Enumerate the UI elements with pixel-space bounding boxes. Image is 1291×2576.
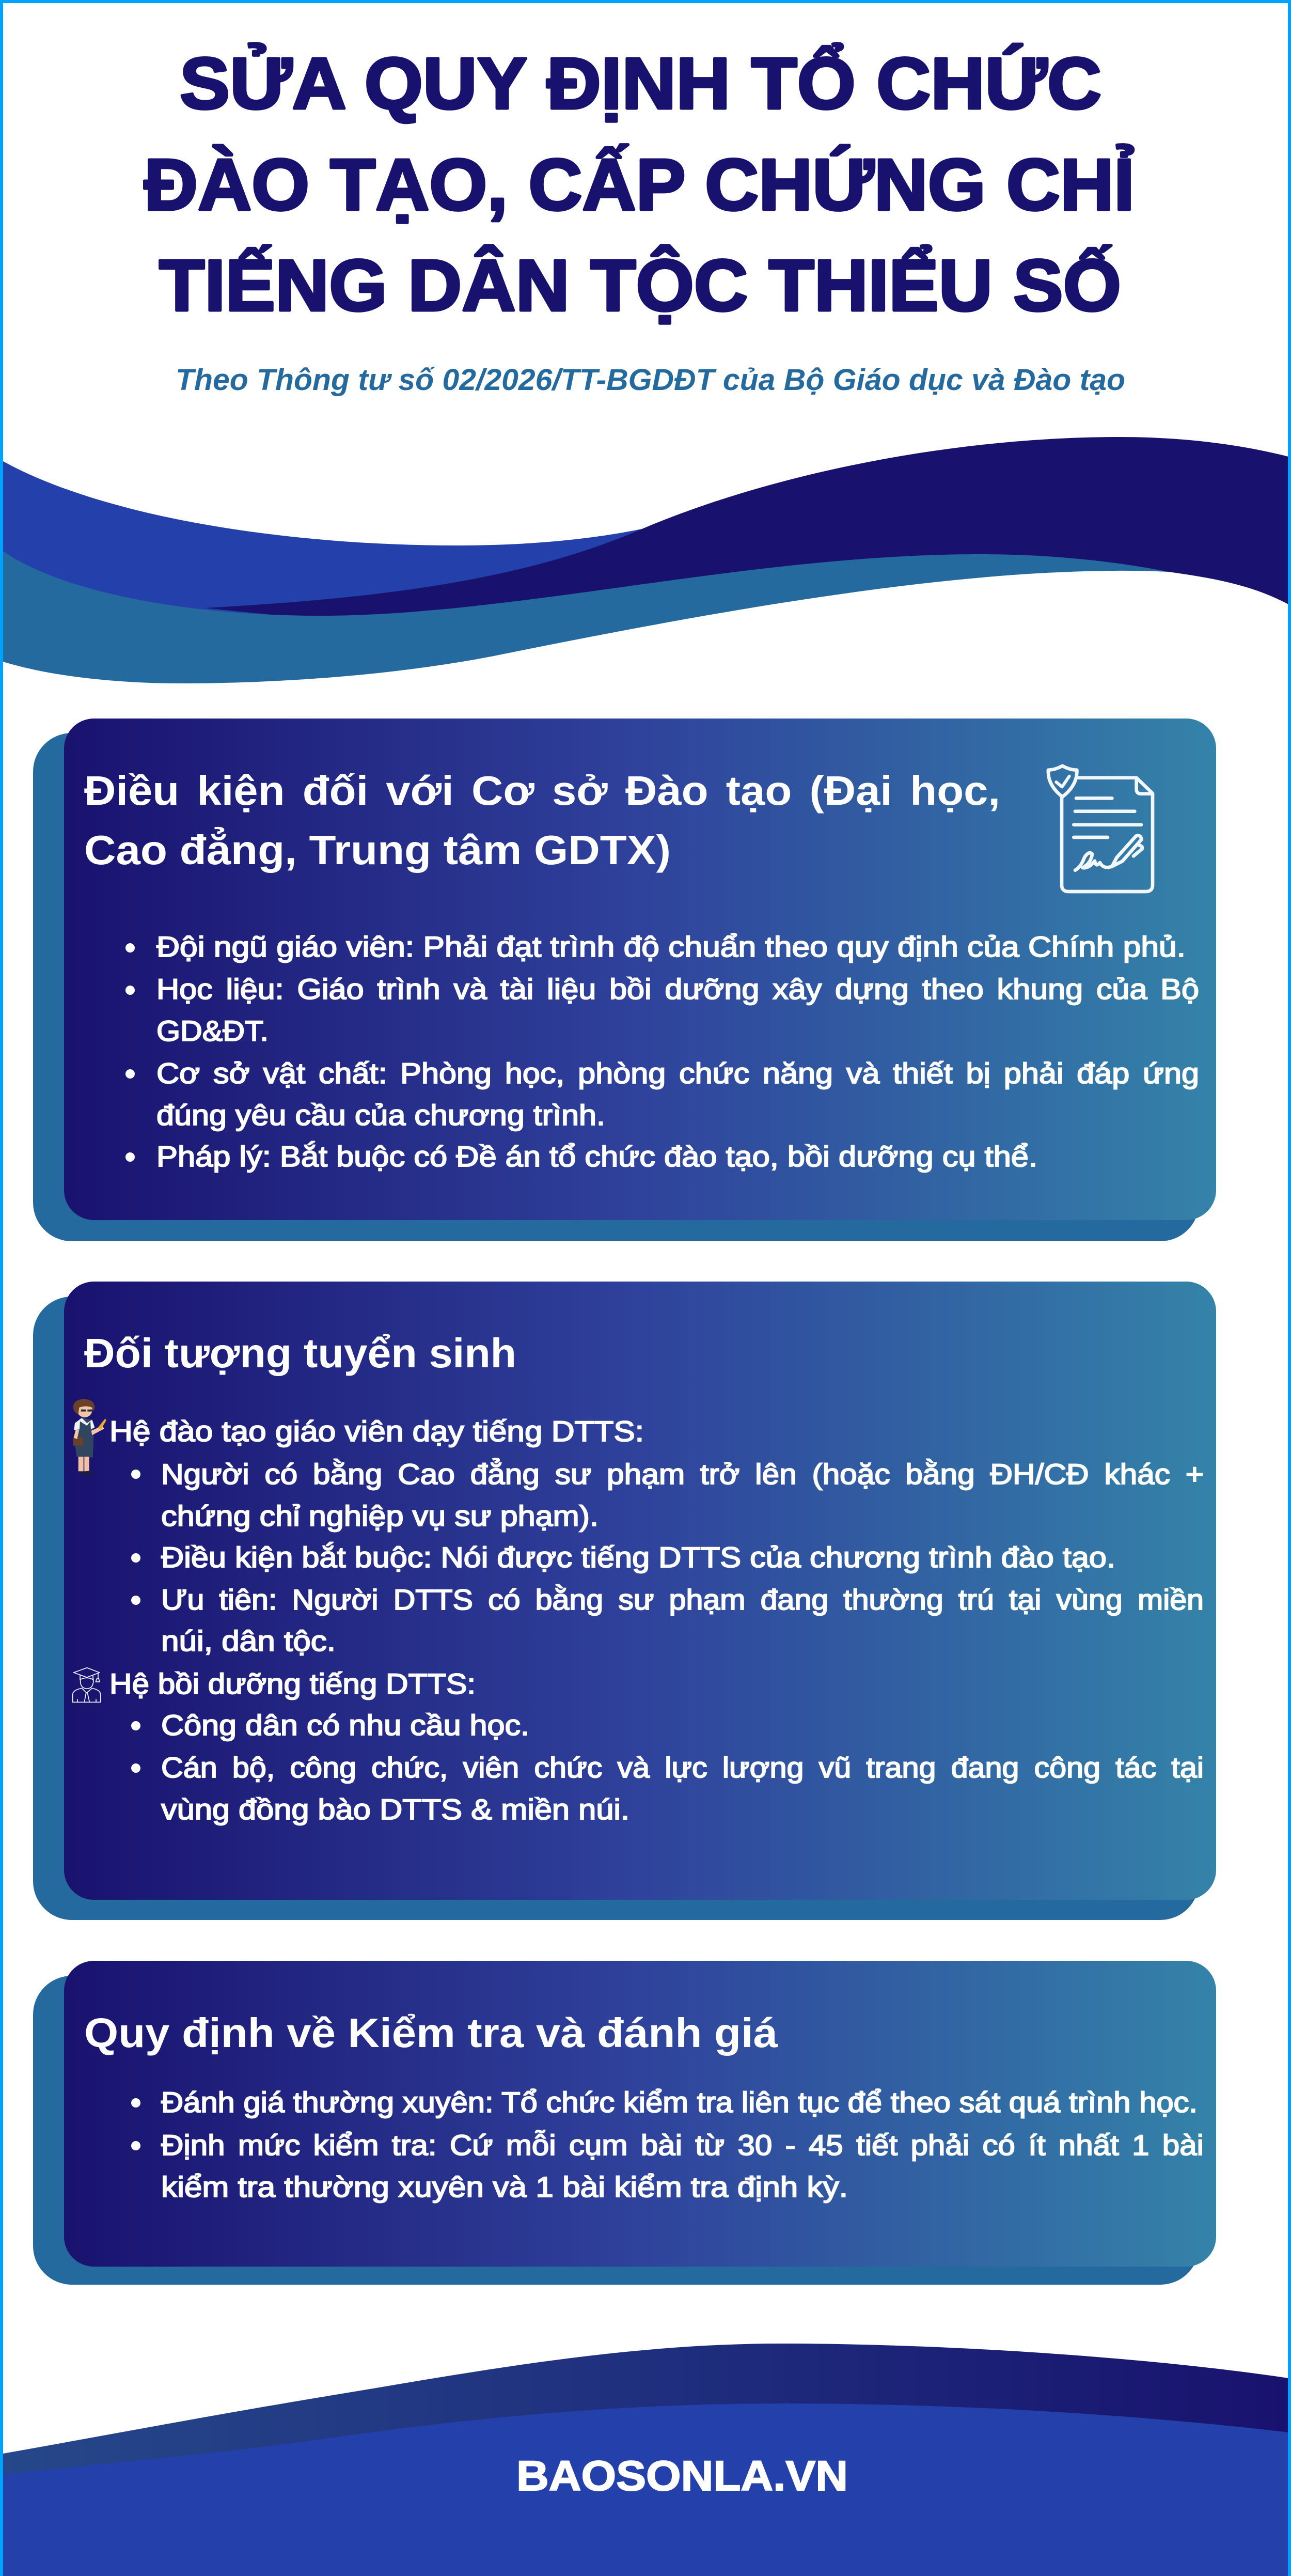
card face	[64, 719, 1216, 1220]
panel: enrolment targets	[33, 1282, 1216, 1920]
bullet list: kiểm tra thường xuyên và 1 bài kiểm tra định kỳ.	[161, 2171, 848, 2203]
card backing	[33, 1297, 1199, 1920]
header wave	[3, 437, 1288, 683]
bullet list: teacher training: Ưu tiên: Người DTTS có bằng sư phạm đang thường trú tại vùng miền	[161, 1583, 1204, 1616]
bullet list: Đánh giá thường xuyên: Tổ chức kiểm tra liên tục để theo sát quá trình học.	[161, 2086, 1198, 2118]
panel: training institution conditions	[33, 719, 1216, 1241]
card face	[64, 1961, 1216, 2267]
bullet list: Định mức kiểm tra: Cứ mỗi cụm bài từ 30 - 45 tiết phải có ít nhất 1 bài	[161, 2129, 1204, 2161]
icon: signed document with shield	[1048, 766, 1153, 892]
bullet list: teacher training: Điều kiện bắt buộc: Nói được tiếng DTTS của chương trình đào tạo.	[161, 1541, 1115, 1573]
bullet list: teacher training: Người có bằng Cao đẳng sư phạm trở lên (hoặc bằng ĐH/CĐ khác +	[161, 1458, 1204, 1490]
card backing	[33, 1976, 1199, 2285]
title: SỬA QUY ĐỊNH TỔ CHỨC	[180, 42, 1101, 124]
subheading: teacher training: Hệ đào tạo giáo viên dạy tiếng DTTS:	[109, 1415, 644, 1447]
subtitle: Theo Thông tư số 02/2026/TT-BGDĐT của Bộ Giáo dục và Đào tạo	[176, 363, 1125, 397]
bullet list: language refresher: Công dân có nhu cầu học.	[161, 1709, 529, 1741]
bullet list: language refresher: vùng đồng bào DTTS & miền núi.	[161, 1793, 629, 1825]
bullet list: Học liệu: Giáo trình và tài liệu bồi dưỡng xây dựng theo khung của Bộ	[156, 973, 1199, 1005]
bullet list: language refresher: Cán bộ, công chức, viên chức và lực lượng vũ trang đang công tác tại	[161, 1751, 1204, 1784]
bullet list: teacher training: núi, dân tộc.	[161, 1625, 336, 1657]
title: ĐÀO TẠO, CẤP CHỨNG CHỈ	[144, 144, 1135, 225]
bullet list	[131, 2086, 1204, 2203]
card face	[64, 1282, 1216, 1900]
bullet list: teacher training	[131, 1458, 1204, 1657]
heading: Đối tượng tuyển sinh	[84, 1330, 516, 1376]
bullet list: teacher training: chứng chỉ nghiệp vụ sư phạm).	[161, 1500, 599, 1532]
bullet list: GD&ĐT.	[156, 1014, 269, 1047]
icon: graduate	[73, 1668, 101, 1702]
bullet list: Cơ sở vật chất: Phòng học, phòng chức năng và thiết bị phải đáp ứng	[156, 1057, 1199, 1089]
heading	[84, 768, 1000, 873]
footer wave	[3, 2344, 1288, 2576]
heading: Quy định về Kiểm tra và đánh giá	[84, 2010, 778, 2056]
bullet list: language refresher	[131, 1709, 1204, 1825]
heading: Điều kiện đối với Cơ sở Đào tạo (Đại học,	[84, 768, 1000, 814]
icon: teacher	[73, 1399, 106, 1475]
panel: testing and assessment	[33, 1961, 1216, 2285]
title	[144, 42, 1135, 326]
bullet list: Đội ngũ giáo viên: Phải đạt trình độ chuẩn theo quy định của Chính phủ.	[156, 930, 1186, 963]
subheading: language refresher: Hệ bồi dưỡng tiếng DTTS:	[109, 1667, 476, 1700]
footer brand: BAOSONLA.VN	[516, 2453, 848, 2500]
bullet list	[125, 930, 1199, 1173]
card backing	[33, 733, 1199, 1241]
heading: Cao đẳng, Trung tâm GDTX)	[84, 826, 671, 873]
title: TIẾNG DÂN TỘC THIỂU SỐ	[159, 244, 1121, 326]
bullet list: Pháp lý: Bắt buộc có Đề án tổ chức đào tạo, bồi dưỡng cụ thể.	[156, 1140, 1037, 1173]
bullet list: đúng yêu cầu của chương trình.	[156, 1099, 605, 1131]
